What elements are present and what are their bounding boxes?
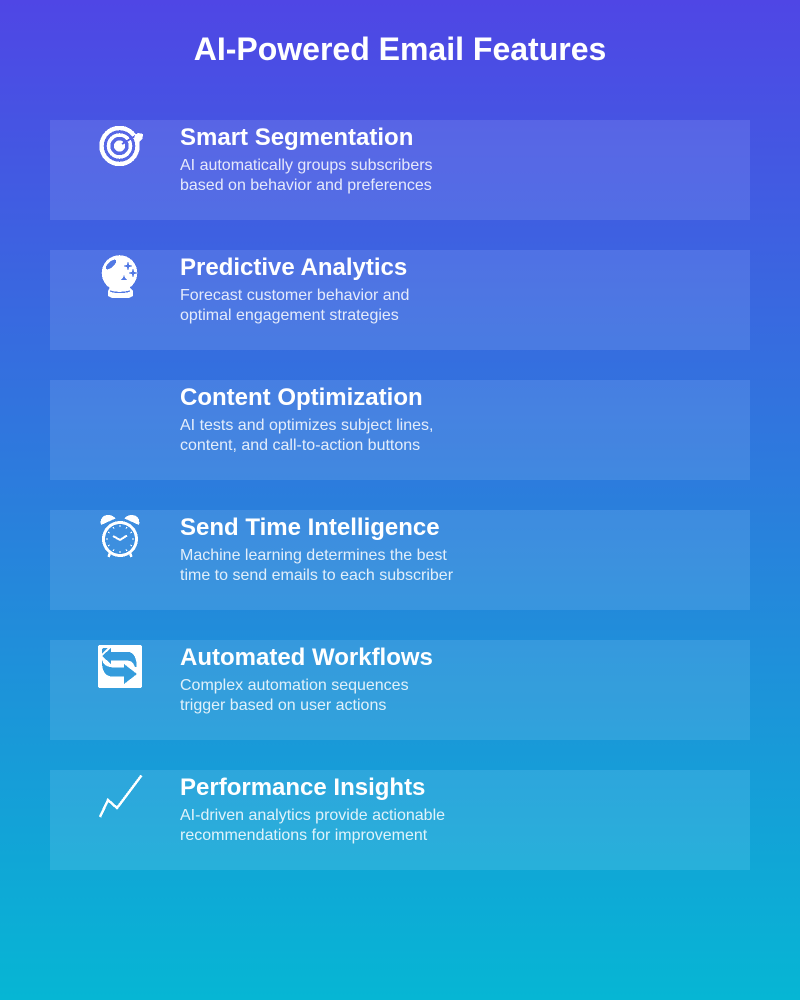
panel: send time intelligence <box>50 510 750 610</box>
text: content optimization <box>180 384 433 454</box>
title: AI-Powered Email Features <box>194 31 606 67</box>
text: send time intelligence: time to send emails to each subscriber <box>180 567 453 584</box>
text: content optimization: AI tests and optimizes subject lines, <box>180 417 433 434</box>
text: predictive analytics <box>180 254 409 324</box>
text: automated workflows <box>180 644 433 714</box>
text: predictive analytics: Predictive Analytics <box>180 254 407 281</box>
text: smart segmentation: Smart Segmentation <box>180 124 413 151</box>
text: automated workflows: Complex automation sequences <box>180 677 409 694</box>
icon: target <box>100 126 143 166</box>
text: predictive analytics: Forecast customer behavior and <box>180 287 409 304</box>
text: performance insights <box>180 774 445 844</box>
text: send time intelligence <box>180 514 453 584</box>
text: send time intelligence: Machine learning determines the best <box>180 547 447 564</box>
text: automated workflows: trigger based on user actions <box>180 697 386 714</box>
text: smart segmentation <box>180 124 433 194</box>
text: performance insights: Performance Insights <box>180 774 425 801</box>
icon: crystal ball <box>102 255 138 298</box>
text: predictive analytics: optimal engagement strategies <box>180 307 399 324</box>
text: content optimization: Content Optimization <box>180 384 423 411</box>
panel: content optimization <box>50 380 750 480</box>
text: smart segmentation: AI automatically groups subscribers <box>180 157 433 174</box>
icon: swap arrows <box>98 645 142 688</box>
panel: predictive analytics <box>50 250 750 350</box>
panel: smart segmentation <box>50 120 750 220</box>
text: smart segmentation: based on behavior and preferences <box>180 177 432 194</box>
panel: automated workflows <box>50 640 750 740</box>
text: performance insights: recommendations for improvement <box>180 827 427 844</box>
icon: alarm clock <box>100 515 140 558</box>
text: performance insights: AI-driven analytics provide actionable <box>180 807 445 824</box>
text: automated workflows: Automated Workflows <box>180 644 433 671</box>
icon: trend line <box>99 775 142 818</box>
text: send time intelligence: Send Time Intelligence <box>180 514 440 541</box>
text: content optimization: content, and call-to-action buttons <box>180 437 420 454</box>
panel: performance insights <box>50 770 750 870</box>
